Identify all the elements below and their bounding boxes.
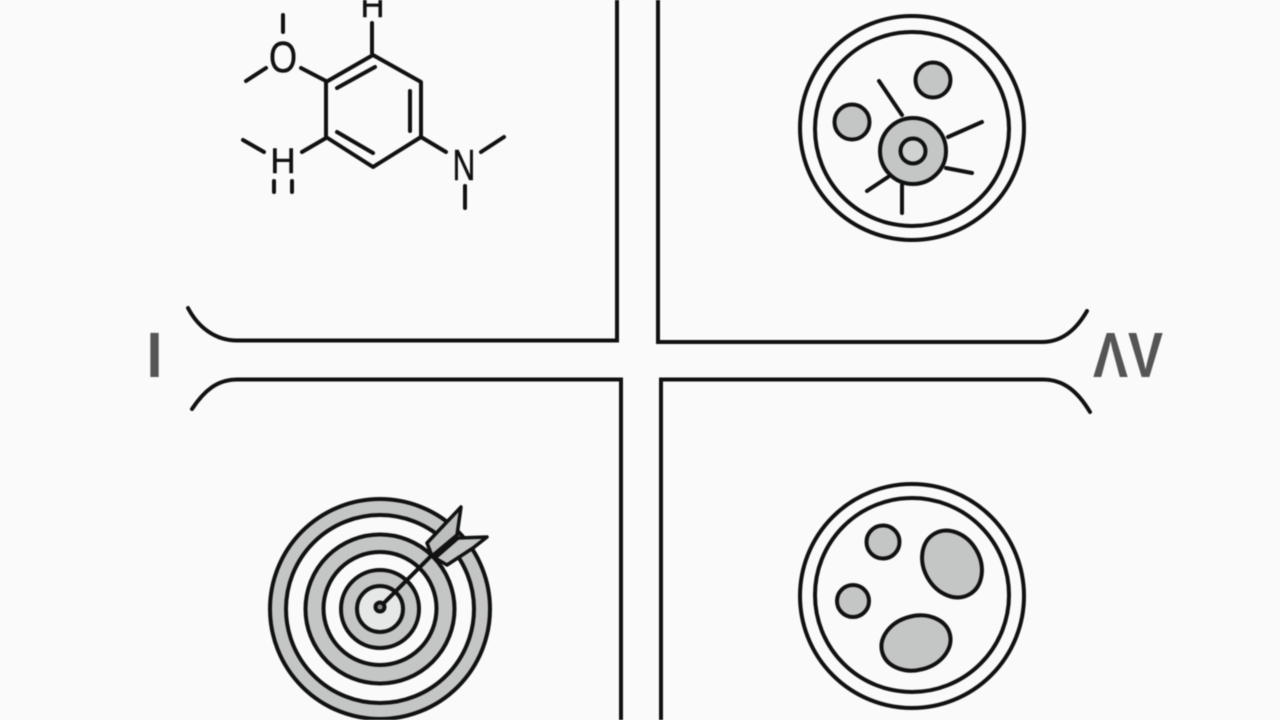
panel: top-right frame xyxy=(658,0,1087,342)
axis label: right: ΛV xyxy=(1093,319,1163,391)
arrow fletching xyxy=(427,507,461,556)
atom label: O: O xyxy=(269,33,297,82)
arrow shaft xyxy=(380,552,435,607)
spokes xyxy=(867,81,982,213)
molecule bonds xyxy=(243,15,504,208)
panel: bottom-right frame xyxy=(661,380,1090,720)
cell inner wall xyxy=(815,32,1009,226)
icon: cell with spokes xyxy=(800,16,1024,240)
panel: top-left frame xyxy=(188,0,617,340)
small vacuole upper xyxy=(866,526,900,558)
small organelle left xyxy=(834,104,870,140)
target rings xyxy=(270,499,490,719)
icon: molecule structure xyxy=(243,0,504,208)
nucleus xyxy=(900,138,926,164)
cell outer wall xyxy=(800,16,1024,240)
small organelle upper xyxy=(916,62,950,98)
large vacuole bottom xyxy=(875,608,957,678)
icon: target with arrow xyxy=(270,499,490,719)
atom label: N: N xyxy=(453,141,475,190)
cell inner wall xyxy=(815,498,1009,692)
cell outer wall xyxy=(800,484,1024,708)
arrow fletching lower xyxy=(435,537,487,565)
small vacuole left xyxy=(837,585,869,617)
large vacuole right xyxy=(910,520,994,608)
central body xyxy=(880,118,946,184)
axis label: left: I xyxy=(146,319,163,391)
benzene ring xyxy=(326,55,421,167)
atom label: lower H: H xyxy=(270,142,296,181)
bullseye xyxy=(376,602,384,612)
icon: cell with vacuoles xyxy=(800,484,1024,708)
panel: bottom-left frame xyxy=(192,380,621,720)
